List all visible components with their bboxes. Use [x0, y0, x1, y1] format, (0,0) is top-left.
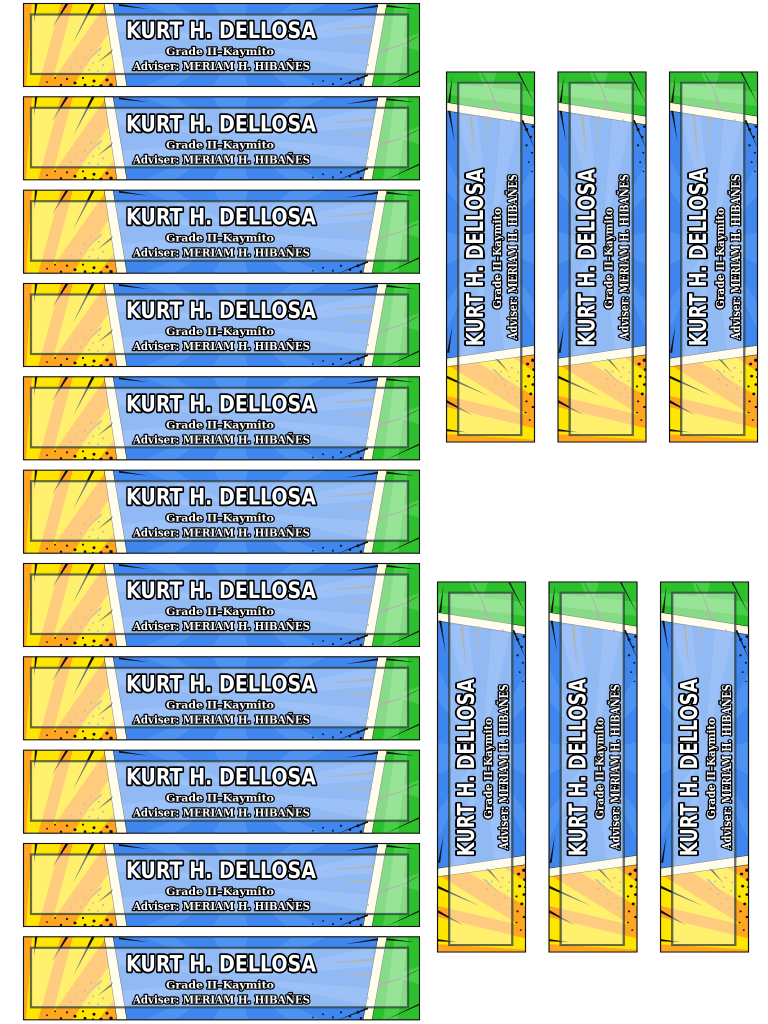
vertical name label, bottom row 2: Adviser: MERIAM H. HIBAÑES	[608, 684, 623, 851]
vertical name label, top row 1: Adviser: MERIAM H. HIBAÑES	[505, 174, 520, 341]
horizontal name label 10: Adviser: MERIAM H. HIBAÑES	[132, 899, 310, 913]
horizontal name label 3: Adviser: MERIAM H. HIBAÑES	[132, 246, 310, 260]
horizontal name label 5: Grade II–Kaymito	[166, 419, 274, 431]
vertical name label, top row 2: Adviser: MERIAM H. HIBAÑES	[617, 174, 632, 341]
vertical name label, top row 2	[558, 72, 647, 442]
vertical name label, top row 2: Grade II–Kaymito	[603, 208, 616, 309]
vertical name label, top row 1	[446, 72, 536, 442]
horizontal name label 8: KURT H. DELLOSA	[126, 672, 316, 697]
horizontal name label 4	[23, 283, 420, 368]
horizontal name label 10: Grade II–Kaymito	[166, 886, 274, 898]
horizontal name label 5	[23, 376, 420, 461]
horizontal name label 4: Grade II–Kaymito	[166, 326, 274, 338]
horizontal name label 1: KURT H. DELLOSA	[126, 19, 316, 44]
vertical name label, bottom row 1: Grade II–Kaymito	[483, 718, 495, 819]
vertical name label, bottom row 1: KURT H. DELLOSA	[454, 679, 480, 856]
horizontal name label 11: KURT H. DELLOSA	[126, 952, 316, 977]
horizontal name label 6: Grade II–Kaymito	[166, 513, 274, 525]
horizontal name label 7: KURT H. DELLOSA	[126, 579, 316, 604]
vertical name label, bottom row 3: KURT H. DELLOSA	[677, 679, 703, 856]
vertical name label, bottom row 1: Adviser: MERIAM H. HIBAÑES	[496, 684, 511, 851]
horizontal name label 5: KURT H. DELLOSA	[126, 392, 316, 417]
vertical name label, bottom row 3	[660, 582, 750, 952]
horizontal name label 2: Grade II–Kaymito	[166, 139, 274, 151]
horizontal name label 6: Adviser: MERIAM H. HIBAÑES	[132, 526, 310, 540]
horizontal name label 1: Adviser: MERIAM H. HIBAÑES	[132, 59, 310, 73]
horizontal name label 4: Adviser: MERIAM H. HIBAÑES	[132, 339, 310, 353]
horizontal name label 11	[23, 936, 420, 1021]
horizontal name label 4: KURT H. DELLOSA	[126, 299, 316, 324]
horizontal name label 9: KURT H. DELLOSA	[126, 766, 316, 791]
horizontal name label 3: Grade II–Kaymito	[166, 233, 274, 245]
horizontal name label 3: KURT H. DELLOSA	[126, 206, 316, 231]
vertical name label, bottom row 1	[437, 582, 527, 952]
horizontal name label 3	[23, 190, 420, 274]
horizontal name label 11: Grade II–Kaymito	[166, 979, 274, 991]
horizontal name label 5: Adviser: MERIAM H. HIBAÑES	[132, 432, 310, 446]
horizontal name label 2	[23, 96, 420, 181]
horizontal name label 9: Adviser: MERIAM H. HIBAÑES	[132, 806, 310, 820]
horizontal name label 8: Adviser: MERIAM H. HIBAÑES	[132, 712, 310, 726]
horizontal name label 11: Adviser: MERIAM H. HIBAÑES	[132, 992, 310, 1006]
horizontal name label 2: Adviser: MERIAM H. HIBAÑES	[132, 152, 310, 166]
vertical name label, top row 1: KURT H. DELLOSA	[463, 169, 489, 346]
vertical name label, bottom row 2: KURT H. DELLOSA	[565, 679, 592, 856]
vertical name label, bottom row 2	[548, 582, 638, 952]
horizontal name label 10	[23, 843, 420, 928]
horizontal name label 7	[23, 563, 420, 648]
horizontal name label 6	[23, 470, 420, 554]
horizontal name label 9	[23, 750, 420, 834]
horizontal name label 6: KURT H. DELLOSA	[126, 486, 316, 511]
horizontal name label 2: KURT H. DELLOSA	[126, 112, 316, 137]
horizontal name label 7: Adviser: MERIAM H. HIBAÑES	[132, 619, 310, 633]
horizontal name label 8: Grade II–Kaymito	[166, 699, 274, 711]
vertical name label, top row 2: KURT H. DELLOSA	[574, 169, 601, 346]
vertical name label, bottom row 3: Adviser: MERIAM H. HIBAÑES	[719, 684, 734, 851]
vertical name label, top row 3: Grade II–Kaymito	[715, 208, 727, 309]
horizontal name label 1	[23, 3, 420, 88]
horizontal name label 7: Grade II–Kaymito	[166, 606, 274, 618]
vertical name label, top row 3: Adviser: MERIAM H. HIBAÑES	[728, 174, 743, 341]
horizontal name label 8	[23, 656, 420, 741]
horizontal name label 10: KURT H. DELLOSA	[126, 859, 316, 884]
vertical name label, top row 3: KURT H. DELLOSA	[686, 169, 712, 346]
vertical name label, bottom row 3: Grade II–Kaymito	[706, 718, 718, 819]
vertical name label, top row 3	[669, 72, 759, 442]
vertical name label, bottom row 2: Grade II–Kaymito	[594, 718, 607, 819]
vertical name label, top row 1: Grade II–Kaymito	[492, 208, 504, 309]
horizontal name label 9: Grade II–Kaymito	[166, 793, 274, 805]
horizontal name label 1: Grade II–Kaymito	[166, 46, 274, 58]
